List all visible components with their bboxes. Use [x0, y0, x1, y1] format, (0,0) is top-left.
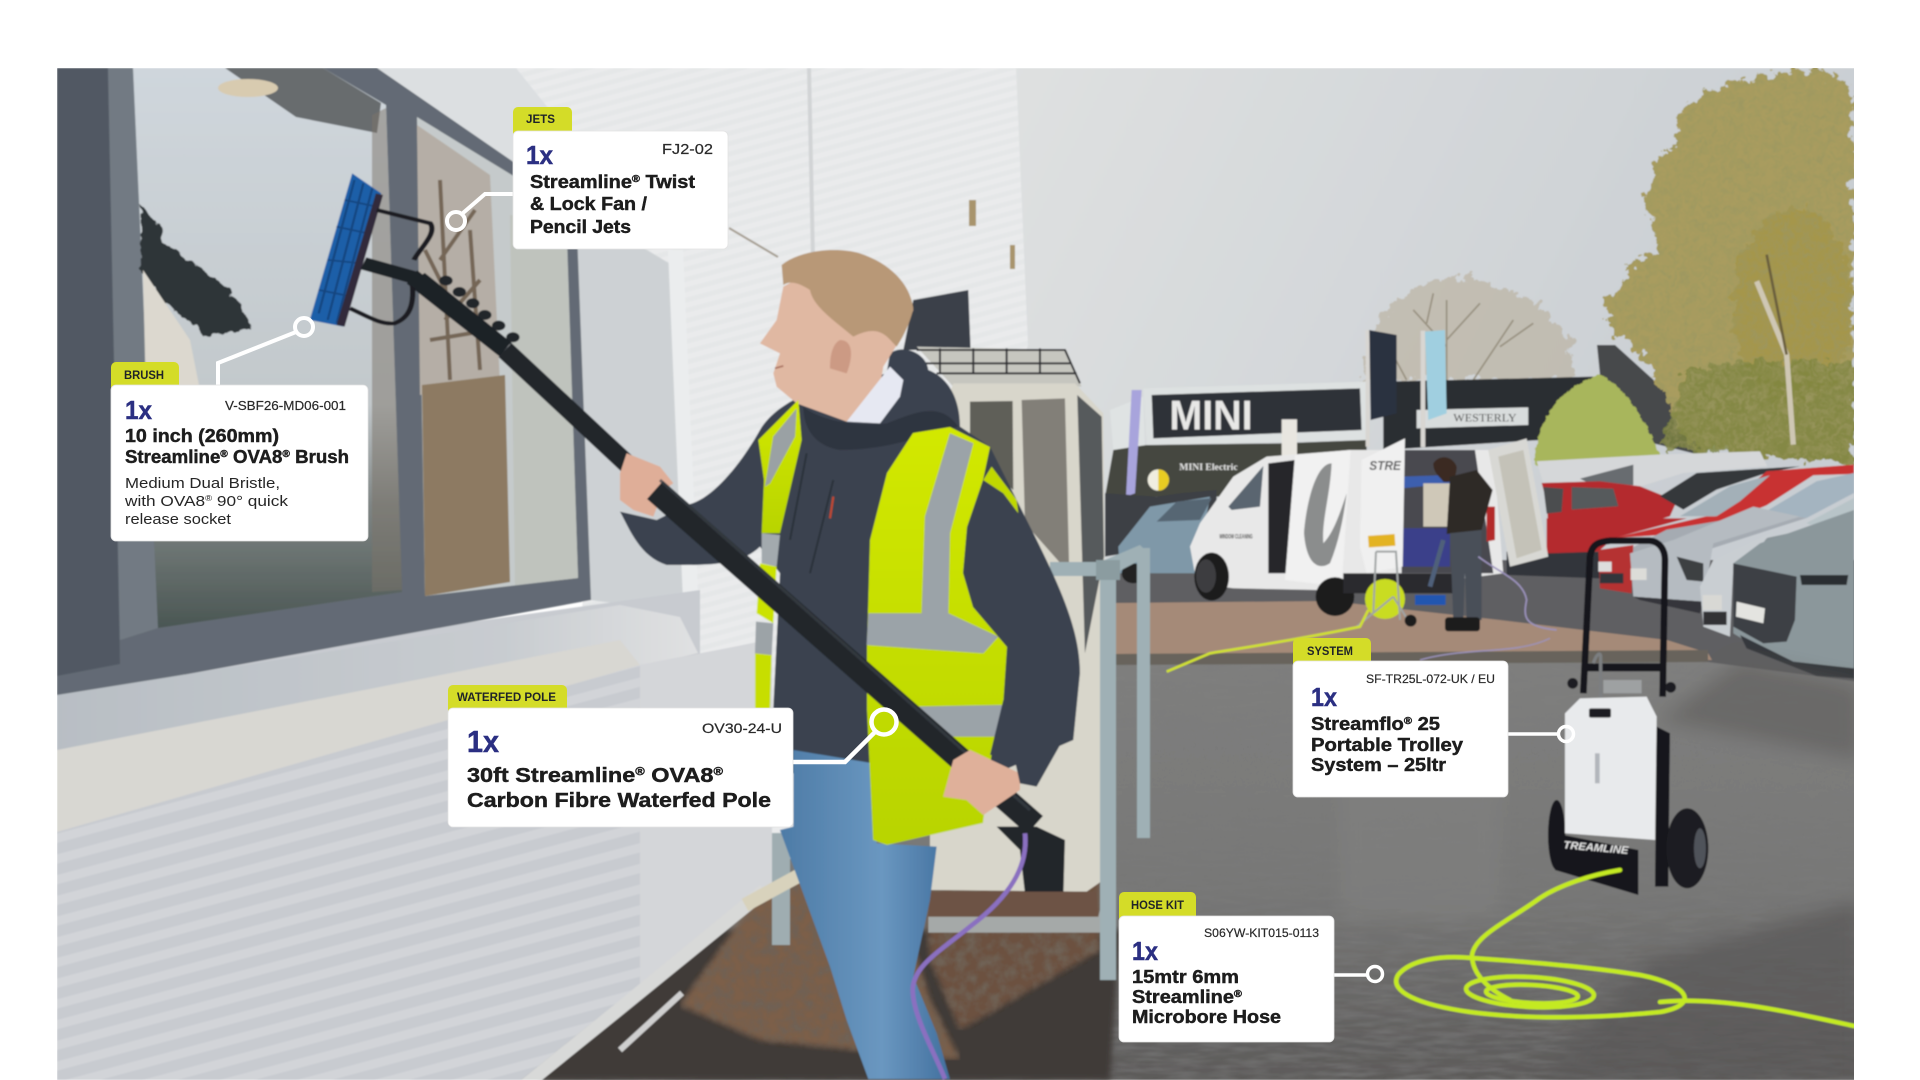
hose reel	[1365, 579, 1405, 619]
hi-vis vest right side	[867, 427, 1007, 845]
van with open doors and second worker: WINDOW CLEANING	[1219, 533, 1253, 540]
callout: brush	[111, 318, 368, 541]
purple feed hose	[913, 833, 1025, 1079]
lighter panel beside the man	[640, 640, 772, 990]
card: brush: 10 inch (260mm)	[125, 426, 279, 446]
card: brush: OVA8	[228, 447, 282, 467]
card: jets: FJ2-02	[662, 142, 713, 158]
card: waterfed pole: Carbon Fibre Waterfed Pole	[467, 790, 771, 812]
air conditioning unit	[902, 289, 1106, 701]
pole through hands	[655, 490, 1035, 825]
lower wall panels	[620, 600, 790, 990]
bush right	[1535, 375, 1660, 465]
dark building behind tree	[1596, 344, 1702, 454]
hand right	[943, 700, 1073, 815]
card: system	[1293, 661, 1508, 797]
hand left	[620, 453, 673, 517]
card: waterfed pole: OVA8	[645, 765, 713, 787]
van with open doors and second worker: STRE	[1369, 458, 1402, 473]
jeans	[780, 750, 950, 1079]
leader line: hose kit	[1334, 966, 1382, 982]
card: hose kit: S06YW-KIT015-0113	[1204, 926, 1319, 940]
tag: brush	[111, 362, 179, 402]
card: hose kit: 15mtr 6mm	[1132, 967, 1239, 987]
card: brush: Medium Dual Bristle,	[125, 475, 280, 492]
head and face	[760, 270, 913, 422]
card: jets: Twist	[640, 172, 695, 192]
tag: jets: JETS	[526, 114, 555, 126]
pipe and post	[772, 833, 790, 945]
dealership buildings: MINI Electric	[1179, 463, 1238, 473]
callout: hose kit	[1119, 892, 1382, 1042]
second worker	[1433, 457, 1457, 482]
parked cars behind, upper part	[1536, 450, 1854, 552]
card: brush: release socket	[125, 511, 232, 528]
window sill	[57, 605, 698, 752]
card: waterfed pole: 30ft Streamline	[467, 765, 610, 787]
card: brush: ®	[205, 494, 212, 503]
lower louvred panel	[58, 666, 640, 1080]
card: system: 25	[1412, 714, 1440, 734]
card: jets	[513, 131, 728, 249]
bush	[1533, 443, 1539, 464]
tag: hose kit: HOSE KIT	[1131, 900, 1184, 912]
card: brush: V-SBF26-MD06-001	[225, 398, 346, 413]
hi-vis vest left side	[758, 400, 802, 533]
window reveal pier	[577, 250, 683, 603]
road	[1100, 560, 1860, 690]
collar	[847, 367, 903, 423]
card: brush	[111, 385, 368, 541]
card: brush: ®	[220, 449, 229, 460]
recessed soffit	[378, 68, 547, 161]
hair	[782, 250, 913, 347]
galvanised railings	[1050, 545, 1150, 980]
window glass right pane	[417, 117, 578, 596]
dealership buildings: MINI	[1169, 392, 1253, 438]
card: hose kit: ®	[1234, 989, 1243, 1000]
tag: jets	[513, 107, 572, 147]
card: jets: ®	[632, 174, 641, 185]
fallen leaves right of leg	[925, 880, 1100, 1030]
yellow supply hose	[1167, 610, 1368, 672]
card: system: System – 25ltr	[1311, 755, 1446, 775]
card: waterfed pole: ®	[635, 766, 645, 778]
fallen leaves	[680, 870, 960, 1060]
dealership buildings	[1105, 330, 1603, 497]
sky	[1000, 68, 1860, 588]
fluorescent microbore hose coil	[1396, 870, 1854, 1026]
bare tree	[1363, 279, 1574, 380]
card: hose kit: 1x	[1132, 936, 1158, 966]
block paving	[1110, 601, 1712, 660]
brush head, jet loop and pole knobs	[310, 173, 520, 348]
trolley system	[1548, 541, 1708, 895]
white louvred wall	[500, 68, 1028, 890]
leader line: system	[1508, 726, 1574, 742]
parked cars behind, lower part	[1507, 507, 1854, 678]
card: jets: 1x	[526, 140, 554, 170]
window frame	[57, 68, 591, 698]
water fed pole upper section	[412, 277, 505, 350]
card: waterfed pole: ®	[713, 766, 723, 778]
card: brush: Streamline	[125, 447, 217, 467]
card: system: Portable Trolley	[1311, 735, 1463, 755]
tag: waterfed pole: WATERFED POLE	[457, 692, 556, 704]
callout: waterfed pole	[448, 685, 896, 827]
card: jets: Streamline	[530, 172, 622, 192]
man	[620, 250, 1080, 773]
wet dark ground by the wall	[540, 930, 1120, 1080]
wall base below window	[196, 590, 700, 673]
card: jets: Pencil Jets	[530, 217, 631, 237]
card: hose kit: Microbore Hose	[1132, 1007, 1281, 1027]
card: system: 1x	[1311, 682, 1337, 712]
lower unit and tray	[927, 739, 1101, 934]
card: brush: with OVA8	[125, 493, 195, 510]
jacket	[620, 349, 1080, 773]
callout: jets	[447, 107, 728, 249]
concrete yard	[520, 662, 1860, 1080]
card: brush: 90° quick	[212, 493, 289, 510]
callout: system	[1293, 638, 1574, 797]
dealership buildings: WESTERLY	[1453, 410, 1517, 424]
card: hose kit	[1119, 916, 1334, 1042]
card: waterfed pole	[448, 708, 793, 827]
kerb	[1116, 649, 1709, 664]
card: hose kit: Streamline	[1132, 987, 1224, 1007]
leader line: waterfed pole	[793, 710, 896, 762]
tag: brush: BRUSH	[124, 370, 164, 382]
card: brush: ®	[282, 449, 291, 460]
leader line: brush	[218, 318, 313, 385]
tag: system: SYSTEM	[1307, 646, 1353, 658]
tag: system	[1293, 638, 1371, 678]
card: waterfed pole: 1x	[467, 724, 500, 759]
card: system: Streamflo	[1311, 714, 1394, 734]
window glass left pane	[133, 68, 402, 628]
tag: waterfed pole	[448, 685, 567, 725]
van with open doors and second worker	[1167, 438, 1557, 672]
card: brush: 1x	[125, 395, 153, 425]
reflective strips	[867, 433, 998, 653]
tag: hose kit	[1119, 892, 1196, 932]
plinth strip	[521, 906, 754, 1080]
card: system: SF-TR25L-072-UK / EU	[1366, 672, 1495, 686]
leader line: jets	[447, 194, 513, 230]
autumn tree	[1607, 68, 1854, 465]
card: waterfed pole: OV30-24-U	[702, 720, 782, 736]
card: system: ®	[1404, 716, 1413, 727]
trolley system: TREAMLINE	[1563, 839, 1630, 857]
card: jets: & Lock Fan /	[530, 194, 647, 214]
parked cars left	[1105, 490, 1217, 583]
card: brush: Brush	[290, 447, 349, 467]
